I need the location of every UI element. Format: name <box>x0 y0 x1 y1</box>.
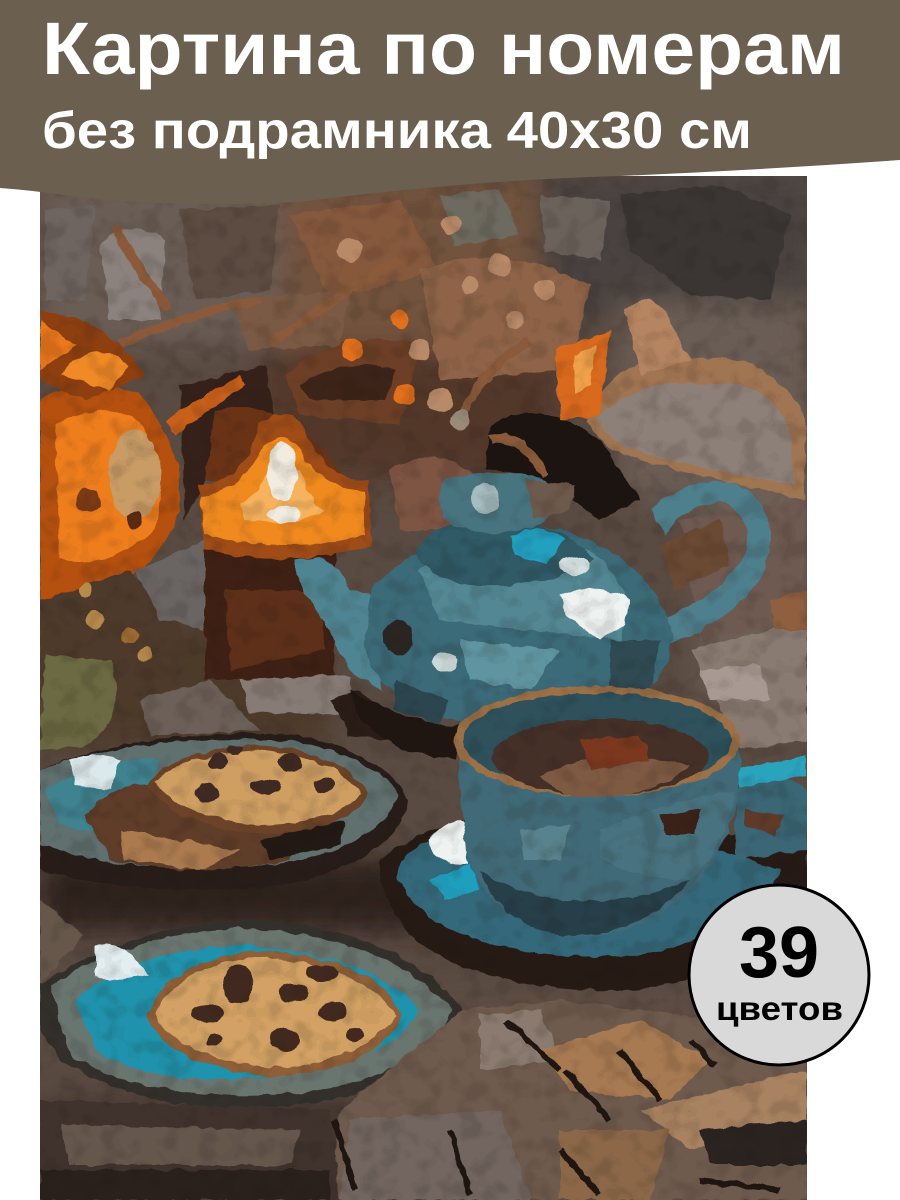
badge: 39 colours: цветов <box>716 990 843 1027</box>
painting: orange pumpkin <box>40 310 245 610</box>
painting: wall patches and branches <box>45 185 805 640</box>
header banner <box>0 0 900 204</box>
badge: 39 colours: 39 <box>739 913 819 993</box>
painting: table cloth <box>690 590 807 750</box>
painting: tea cup and saucer <box>379 686 807 990</box>
painting: candle <box>198 408 372 680</box>
badge: 39 colours <box>689 885 869 1065</box>
painting: teapot <box>295 472 770 760</box>
painting: wooden table <box>40 900 807 1200</box>
title: Картина по номерам <box>42 7 845 90</box>
painting: left foliage <box>40 540 420 750</box>
subtitle: без подрамника 40х30 см <box>42 102 752 160</box>
painting background: blurred wall <box>40 176 810 1200</box>
painting: tea still life <box>40 176 810 1200</box>
painting: berries <box>338 215 555 430</box>
painting: lower plate with cookie <box>40 920 462 1108</box>
painting: upper plate with cookies <box>40 733 408 890</box>
